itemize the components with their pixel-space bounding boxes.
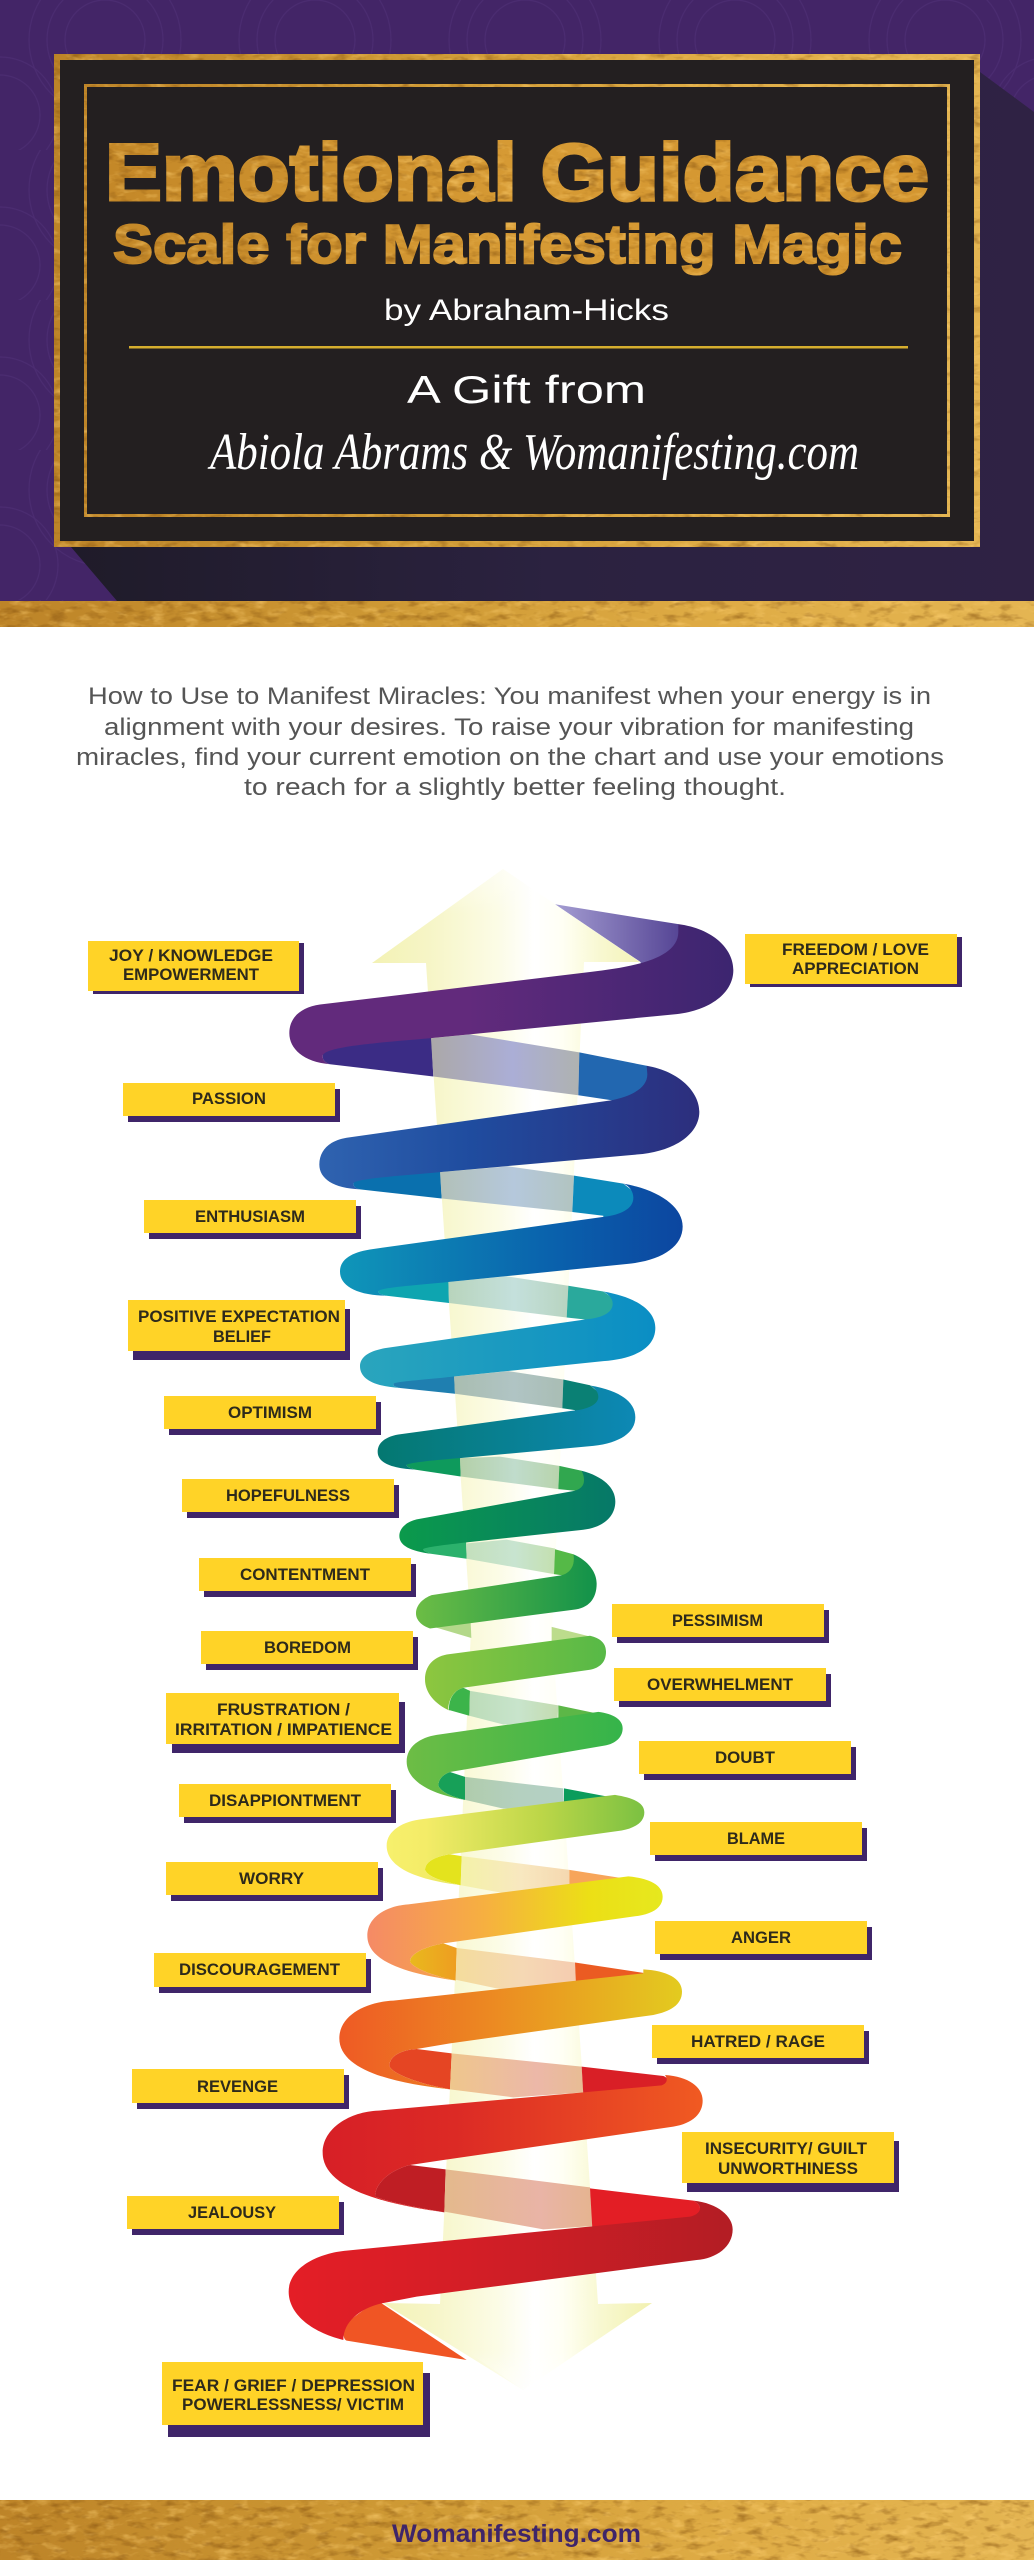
title line one: Emotional Guidance [105, 128, 929, 218]
ribbon band blue [340, 1184, 683, 1296]
intro paragraph: miracles, find your current emotion on the chart and use your emotions [76, 744, 944, 771]
footer gold band [0, 2500, 1034, 2560]
label: joy: EMPOWERMENT [123, 966, 259, 984]
label: jealousy: JEALOUSY [188, 2204, 276, 2222]
dark title board inner [87, 87, 947, 514]
ribbon band orange [339, 1969, 682, 2089]
back ribbon two [353, 1165, 637, 1220]
intro paragraph: to reach for a slightly better feeling thought. [244, 774, 786, 801]
spiral lower section [289, 1969, 733, 2340]
label: insecurity [682, 2132, 899, 2192]
label: contentment: CONTENTMENT [240, 1566, 370, 1584]
back ribbon six [423, 1537, 578, 1578]
label: boredom [201, 1631, 418, 1670]
label: frustration: FRUSTRATION / [217, 1701, 350, 1719]
back ribbon five [407, 1452, 588, 1494]
label: freedom: APPRECIATION [792, 960, 919, 978]
central double-headed arrow [372, 869, 652, 2390]
ribbon band deep green [399, 1471, 615, 1554]
script authors line: Abiola Abrams & Womanifesting.com [208, 424, 859, 481]
label: frustration: IRRITATION / IMPATIENCE [175, 1721, 392, 1739]
label: passion [123, 1083, 340, 1122]
label: frustration [166, 1693, 405, 1753]
label: revenge: REVENGE [197, 2078, 278, 2096]
ribbon band purple [289, 924, 733, 1064]
label: overwhelment [614, 1668, 831, 1707]
label: hatred [652, 2025, 869, 2064]
label: insecurity: INSECURITY/ GUILT [705, 2140, 867, 2158]
label: fear: FEAR / GRIEF / DEPRESSION [172, 2377, 415, 2395]
label: worry [166, 1862, 383, 1901]
back ribbon eleven [410, 1943, 643, 1991]
label: revenge [132, 2069, 349, 2109]
byline: by Abraham-Hicks [384, 294, 669, 327]
header panel [0, 0, 1034, 601]
back ribbon seven [430, 1622, 590, 1645]
label: optimism [164, 1396, 381, 1435]
ribbon band red orange [323, 2075, 703, 2212]
title line two: Scale for Manifesting Magic [113, 213, 902, 275]
bottom back ribbon behind arrow [343, 2297, 467, 2360]
label: anger [655, 1921, 872, 1960]
gold divider [129, 346, 908, 348]
label: freedom [745, 934, 962, 987]
intro paragraph: How to Use to Manifest Miracles: You manifest when your energy is in [88, 683, 931, 710]
intro paragraph: alignment with your desires. To raise your vibration for manifesting [104, 714, 914, 741]
label: positive expectation: POSITIVE EXPECTATION [138, 1308, 340, 1326]
label: enthusiasm: ENTHUSIASM [195, 1208, 305, 1226]
label: freedom: FREEDOM / LOVE [782, 941, 929, 959]
label: jealousy [127, 2196, 344, 2235]
back ribbon three [378, 1276, 617, 1323]
ribbon band green [416, 1554, 597, 1628]
label: doubt: DOUBT [715, 1749, 775, 1767]
back ribbon one [323, 1031, 660, 1104]
label: contentment [199, 1558, 416, 1597]
label: overwhelment: OVERWHELMENT [647, 1676, 793, 1694]
label: optimism: OPTIMISM [228, 1404, 312, 1422]
label: positive expectation [128, 1300, 350, 1360]
label: positive expectation: BELIEF [213, 1328, 271, 1346]
label: hopefulness [182, 1479, 399, 1518]
ribbon band light green [425, 1636, 606, 1711]
label: disappointment: DISAPPIONTMENT [209, 1792, 361, 1810]
ribbon band mid green [407, 1712, 623, 1800]
label: disappointment [179, 1784, 396, 1823]
dark title board [60, 60, 974, 541]
label: fear: POWERLESSNESS/ VICTIM [182, 2396, 404, 2414]
label: doubt [639, 1741, 856, 1780]
spiral middle section [367, 1385, 663, 1991]
top back ribbon behind arrow [555, 904, 690, 966]
ribbon band navy [319, 1066, 699, 1189]
intro paragraph [76, 683, 944, 801]
ribbon band teal [378, 1385, 635, 1470]
label: discouragement [154, 1953, 371, 1993]
label: boredom: BOREDOM [264, 1639, 351, 1657]
label: joy: JOY / KNOWLEDGE [109, 947, 273, 965]
label: enthusiasm [144, 1200, 361, 1239]
label: insecurity: UNWORTHINESS [718, 2160, 858, 2178]
label: hopefulness: HOPEFULNESS [226, 1487, 350, 1505]
label: blame: BLAME [727, 1830, 785, 1848]
label: worry: WORRY [239, 1870, 304, 1888]
label: discouragement: DISCOURAGEMENT [179, 1961, 340, 1979]
back ribbon four [393, 1370, 602, 1414]
gold outer frame [54, 54, 980, 547]
label: passion: PASSION [192, 1090, 266, 1108]
gold band under header [0, 601, 1034, 627]
back ribbon eight [449, 1688, 598, 1724]
label: anger: ANGER [731, 1929, 791, 1947]
ribbon band yellow green [387, 1795, 644, 1885]
label: hatred: HATRED / RAGE [691, 2033, 825, 2051]
ribbon band light blue [360, 1292, 655, 1388]
label: pessimism: PESSIMISM [672, 1612, 763, 1630]
spiral upper section [289, 924, 733, 1414]
ribbon band red [289, 2201, 733, 2340]
gift line: A Gift from [407, 369, 646, 412]
gold inner frame [84, 84, 950, 517]
back ribbon nine [438, 1772, 615, 1809]
back ribbon thirteen [375, 2165, 700, 2229]
back ribbon ten [425, 1854, 628, 1896]
ribbon band yellow orange [367, 1876, 663, 1980]
back ribbon twelve [389, 2049, 668, 2097]
label: fear [162, 2362, 430, 2437]
footer website: Womanifesting.com [392, 2520, 641, 2548]
label: pessimism [612, 1604, 829, 1643]
label: blame [650, 1822, 867, 1861]
label: joy [88, 941, 304, 994]
